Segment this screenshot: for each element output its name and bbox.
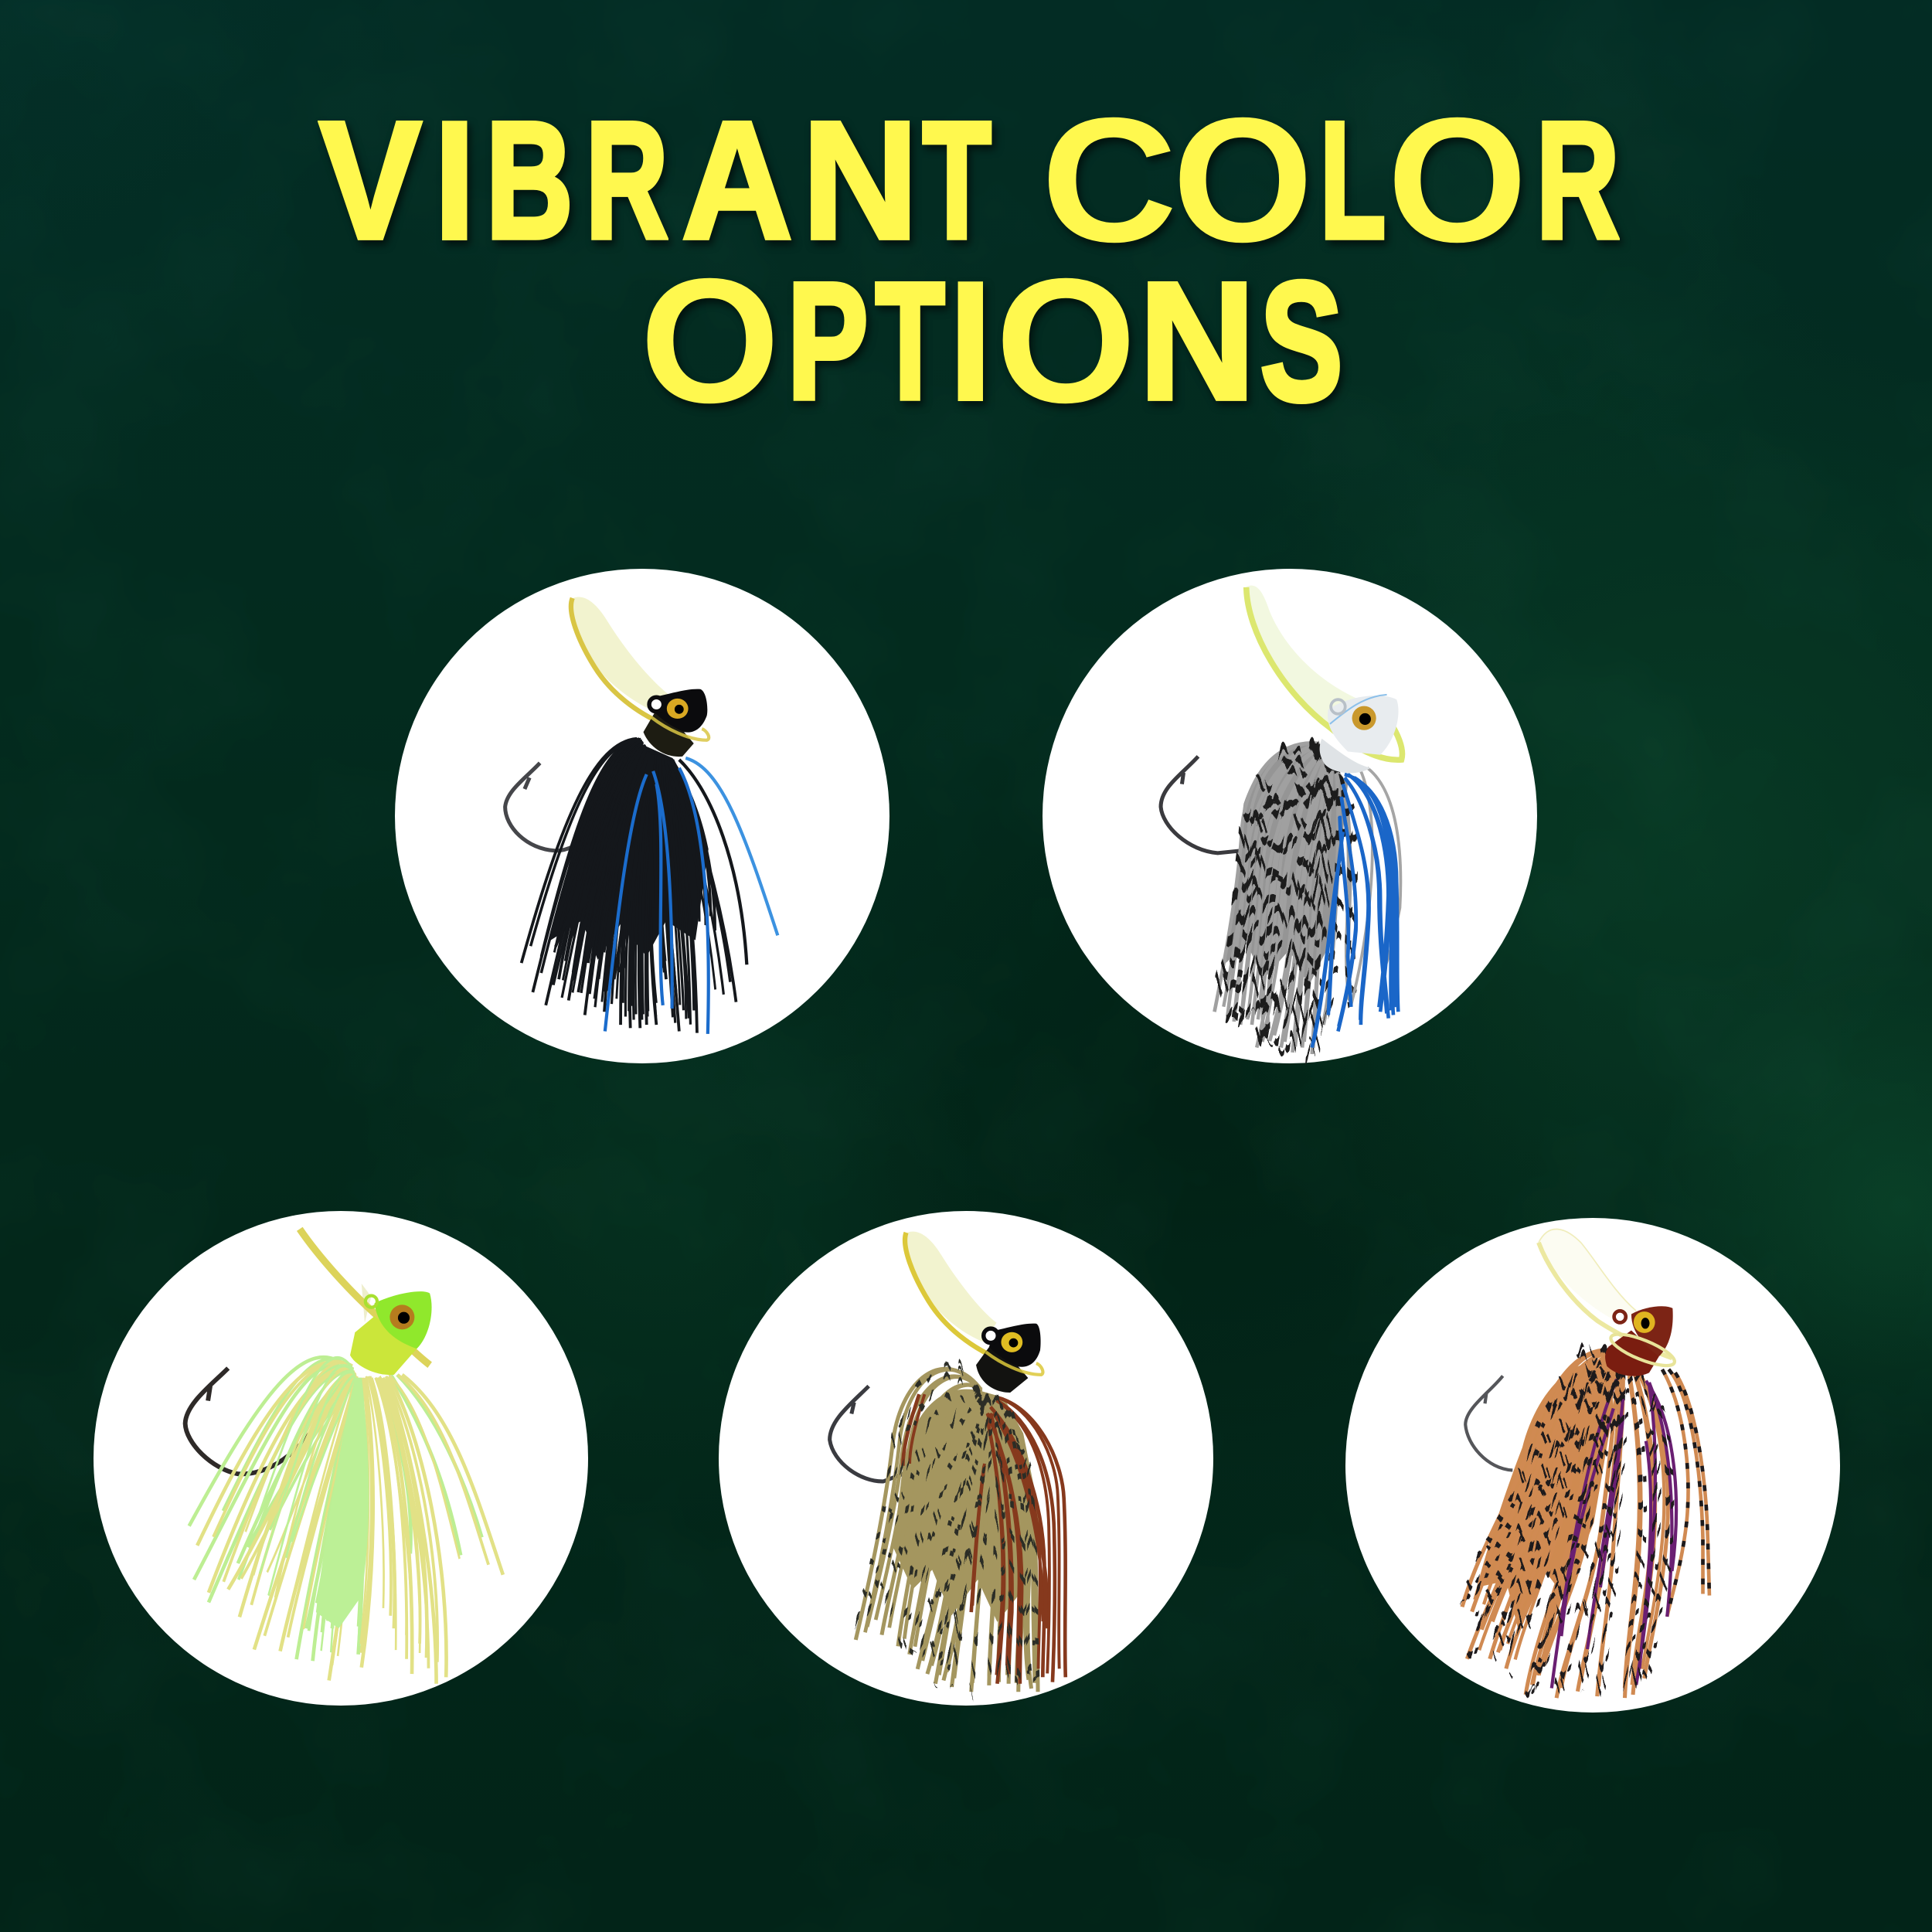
title line 2 — [640, 241, 1345, 440]
jig head — [1320, 695, 1399, 773]
title line 1: O — [1172, 80, 1313, 279]
skirt — [1462, 1350, 1709, 1699]
title line 1: C — [1041, 80, 1177, 279]
hook — [505, 763, 588, 851]
title line 2: O — [995, 241, 1136, 440]
panel: black and blue lure — [395, 569, 889, 1063]
title line 1: T — [923, 87, 992, 273]
spinner blade — [1539, 1229, 1672, 1358]
title line 2: I — [946, 243, 995, 438]
title line 1: V — [319, 87, 422, 274]
title line 1: N — [802, 87, 918, 274]
skirt — [189, 1357, 503, 1684]
title line 1: L — [1320, 87, 1386, 273]
jig head — [976, 1324, 1043, 1393]
title line 1: I — [430, 83, 479, 277]
hook — [185, 1368, 313, 1474]
title — [318, 80, 1623, 440]
title line 2: P — [787, 248, 869, 434]
title line 1: B — [486, 87, 573, 273]
lure illustration — [1161, 586, 1402, 1056]
hook — [1161, 757, 1240, 853]
panel: tan and rust lure — [719, 1211, 1213, 1706]
white circle — [719, 1211, 1213, 1706]
hook — [830, 1386, 903, 1481]
skirt — [855, 1369, 1066, 1692]
spinner blade — [300, 1229, 430, 1365]
lure illustration — [505, 597, 777, 1034]
title line 1: R — [1536, 87, 1619, 273]
title line 1: A — [682, 87, 792, 274]
skirt — [522, 739, 777, 1034]
white circle — [1043, 569, 1537, 1063]
panel: white, grey and blue lure — [1043, 569, 1537, 1063]
white circle — [94, 1211, 588, 1706]
skirt — [1214, 742, 1400, 1056]
title line 1 — [318, 80, 1623, 404]
jig head — [1605, 1306, 1678, 1376]
panel: chartreuse lure — [94, 1211, 588, 1706]
title line 2: O — [640, 241, 780, 440]
spinner blade — [1245, 586, 1402, 760]
title line 2: T — [876, 248, 945, 434]
jig head — [644, 689, 709, 757]
panel: orange and purple lure — [1345, 1218, 1840, 1713]
lure illustration — [830, 1232, 1066, 1692]
white circle — [1345, 1218, 1840, 1713]
jig head — [350, 1291, 432, 1375]
lure illustration — [185, 1229, 503, 1684]
white circle — [395, 569, 889, 1063]
hook — [1465, 1376, 1512, 1471]
title line 2: S — [1260, 247, 1342, 436]
spinner blade — [905, 1232, 997, 1359]
spinner blade — [571, 597, 668, 724]
title line 1: R — [586, 87, 668, 273]
title line 2: N — [1139, 247, 1255, 434]
lure illustration — [1462, 1229, 1709, 1699]
title line 1: O — [1387, 80, 1527, 279]
